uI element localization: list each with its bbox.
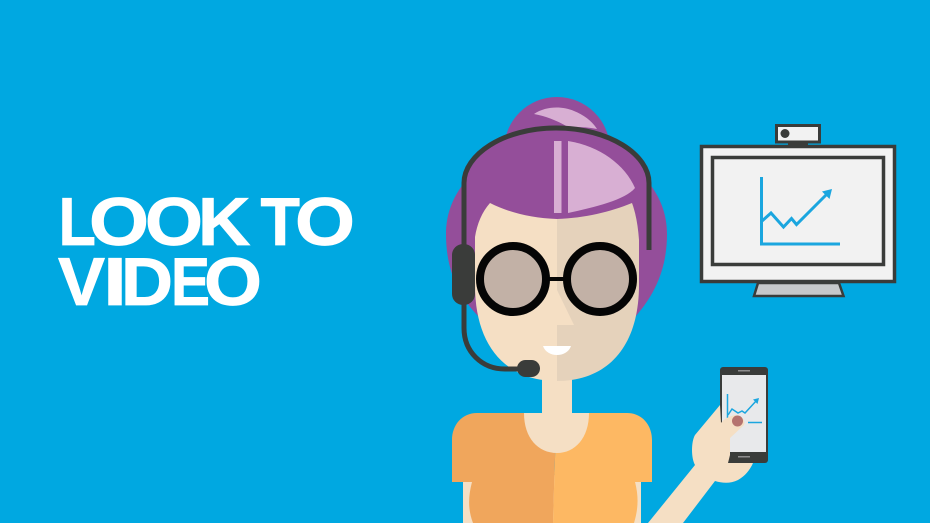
monitor stand (754, 283, 844, 296)
hair (446, 128, 667, 316)
title: K (198, 184, 250, 260)
title: T (260, 184, 300, 260)
title: O (204, 244, 262, 320)
title: O (145, 184, 203, 260)
smile (543, 346, 571, 355)
title (58, 184, 355, 320)
hair highlights (554, 141, 635, 213)
arm and hand (648, 405, 753, 523)
headset (452, 128, 649, 377)
title: O (89, 184, 149, 260)
webcam (776, 126, 820, 147)
phone chart (728, 394, 762, 422)
title: L (58, 184, 96, 260)
monitor (702, 146, 894, 282)
title: I (103, 244, 127, 320)
title: V (58, 244, 105, 320)
neck (542, 370, 572, 420)
title: O (295, 184, 355, 260)
character: woman with headset (446, 97, 667, 523)
thumb nail (732, 416, 743, 426)
torso and shirt (452, 413, 652, 523)
title: E (171, 244, 210, 320)
smartphone (720, 367, 768, 463)
line chart (762, 177, 840, 244)
hair bun (504, 97, 610, 203)
title: D (121, 244, 173, 320)
face (475, 203, 639, 381)
glasses (480, 246, 633, 312)
